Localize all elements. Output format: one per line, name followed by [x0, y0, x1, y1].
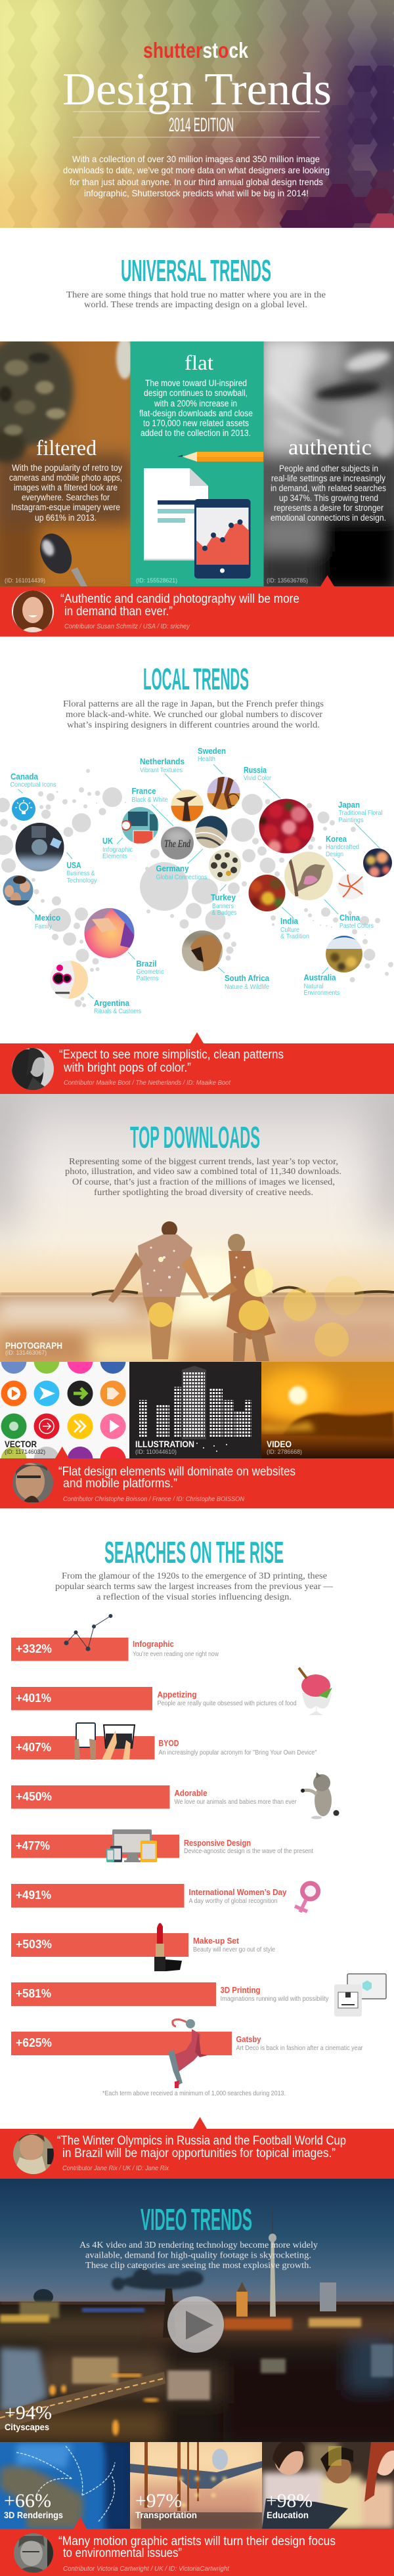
panel: transportation	[130, 2442, 262, 2531]
labels: country names: Japan	[338, 800, 360, 810]
callout: Jane Rix quote: Contributor Jane Rix / UK / ID: Jane Rix	[62, 2164, 169, 2172]
icon: Canada lightbulb	[12, 797, 35, 821]
text: intro paragraph: With a collection of over 30 million images and 350 million image	[72, 154, 320, 164]
labels: country names: Infographic	[102, 846, 133, 854]
text: intro paragraph: downloads to date, we’ve got more data on what designers are looking	[63, 165, 330, 175]
heading: video trends: These clip categories are seeing the most explosive growth.	[85, 2261, 311, 2271]
text: flat: The move toward UI-inspired	[145, 378, 247, 388]
labels: country names: Global Connections	[156, 873, 208, 881]
labels: country names: Handcrafted	[326, 843, 359, 851]
town hall and landmarks	[0, 2282, 394, 2400]
text: filtered	[5, 437, 122, 584]
subtitle: 2014 edition: 2014 EDITION	[169, 114, 234, 136]
labels: country names: South Africa	[225, 973, 270, 983]
callout: Christophe Boisson quote	[0, 1447, 394, 1508]
panel: vector icons: (ID: 117146032)	[5, 1449, 45, 1455]
text: authentic: up 347%. This growing trend	[279, 493, 378, 503]
heading: top downloads: TOP DOWNLOADS	[130, 1120, 260, 1154]
bubble: Argentina	[50, 961, 88, 999]
bubble: France	[161, 827, 194, 860]
grey land bubbles	[0, 769, 393, 1007]
labels: country names: Argentina	[94, 998, 130, 1008]
labels: country names: Natural	[303, 982, 323, 990]
labels: country names: France	[131, 786, 156, 796]
callout: Maaike Boot quote	[0, 1032, 394, 1094]
labels: country names: Sweden	[198, 746, 226, 756]
text: flat: added to the collection in 2013.	[141, 428, 251, 438]
bar: 3D printing +581%: +581%	[16, 1987, 51, 2000]
bar: gatsby +625%: Gatsby	[236, 2034, 261, 2044]
callout: Maaike Boot quote: “Expect to see more simplistic, clean patterns	[59, 1048, 284, 1062]
icon: play button	[167, 2296, 224, 2353]
heading: top downloads: Of course, that’s just a fraction of the millions of images we licensed,	[72, 1177, 335, 1187]
panel: video sunset: VIDEO	[267, 1439, 292, 1449]
bar: gatsby +625%: Art Deco is back in fashion after a cinematic year	[236, 2044, 363, 2052]
label: photograph	[5, 1340, 62, 1356]
portrait: Susan Schmitz	[12, 590, 54, 632]
labels: country names: Banners	[212, 902, 234, 910]
heading: searches on the rise: From the glamour of the 1920s to the emergence of 3D printing, these	[62, 1571, 327, 1581]
labels: country names: Mexico	[35, 913, 60, 923]
callout: Jane Rix quote	[0, 2117, 394, 2179]
bar: make-up set +503%	[11, 1923, 275, 1971]
bar: appetizing +401%	[11, 1668, 332, 1715]
text: flat	[139, 351, 253, 438]
label: photograph: (ID: 131463067)	[5, 1349, 47, 1356]
bar: responsive design +477%	[11, 1829, 313, 1862]
bubble: Mexico	[3, 875, 33, 907]
heading: top downloads: photo, illustration, and video saw a combined total of 11,340 downloads.	[65, 1167, 341, 1177]
labels: country names: Vibrant Textures	[140, 766, 183, 774]
labels: country names: UK	[102, 836, 114, 846]
bar: gatsby +625%: +625%	[16, 2036, 52, 2049]
heading: top downloads: Representing some of the biggest current trends, last year’s top vector,	[69, 1157, 338, 1167]
text: filtered: filtered	[36, 437, 97, 460]
heading: top downloads: further spotlighting the broad diversity of creative needs.	[94, 1188, 313, 1198]
bar: adorable +450%: +450%	[16, 1790, 52, 1803]
labels: country names: Black & White	[131, 796, 168, 804]
panel: education: Education	[267, 2510, 309, 2520]
bar: make-up set +503%: Make-up Set	[193, 1936, 240, 1946]
tv tower	[269, 2205, 276, 2317]
bar: 3D printing +581%: 3D Printing	[221, 1985, 261, 1995]
heading: universal trends	[66, 253, 326, 310]
text: authentic: authentic	[288, 436, 372, 460]
bubble: Sweden	[207, 777, 240, 810]
labels: country names: Technology	[67, 877, 97, 884]
heading: local trends	[63, 662, 324, 730]
bar: responsive design +477%: +477%	[16, 1839, 50, 1852]
labels: country names	[11, 746, 382, 1015]
panel: filtered	[0, 335, 138, 591]
panel: 3D renderings: +66%	[4, 2490, 51, 2512]
callout: Susan Schmitz quote: in demand than ever.”	[64, 605, 173, 619]
lens flares	[148, 1257, 364, 1357]
bar: infographic +332%: You’re even reading one right now	[133, 1650, 219, 1658]
callout: Maaike Boot quote: with bright pops of color.”	[63, 1061, 191, 1075]
bar: international womens day +491%: International Women’s Day	[189, 1887, 287, 1897]
bar: appetizing +401%: People are really quite obsessed with pictures of food	[158, 1699, 297, 1707]
labels: country names: Conceptual Icons	[11, 781, 56, 789]
bar: infographic +332%: +332%	[16, 1642, 52, 1655]
panel: illustration skyline: (ID: 110044610)	[135, 1449, 177, 1455]
bar: infographic +332%: Infographic	[133, 1639, 174, 1649]
heading: local trends: more black-and-white. We crunched our global numbers to discover	[66, 710, 322, 720]
text: flat: with a 200% increase in	[154, 399, 237, 408]
labels: country names: Russia	[244, 765, 267, 775]
icon: tablet chart	[194, 499, 251, 579]
labels: country names: Geometric	[137, 968, 164, 976]
bubble: Japan	[363, 848, 392, 877]
labels: country names: & Tradition	[280, 932, 309, 940]
labels: country names: Design	[326, 850, 343, 858]
labels: country names: Culture	[280, 926, 299, 934]
labels: country names: Turkey	[211, 892, 236, 902]
callout: Christophe Boisson quote: Contributor Christophe Boisson / France / ID: Christophe BOISSON	[63, 1495, 244, 1503]
labels: country names: China	[339, 913, 361, 923]
callout: Christophe Boisson quote: and mobile platforms.”	[63, 1477, 177, 1491]
panel: video trends cityscape	[0, 2179, 394, 2443]
labels: country names: Family	[35, 923, 53, 930]
bubble: Brazil	[84, 908, 135, 959]
callout: Christophe Boisson quote: “Flat design elements will dominate on websites	[58, 1465, 296, 1479]
bubble: UK	[121, 807, 159, 844]
bar: BYOD +407%: +407%	[16, 1741, 51, 1754]
callout: Victoria Cartwright quote	[0, 2518, 394, 2576]
bar: adorable +450%: We love our animals and babies more than ever	[175, 1798, 297, 1806]
panel: transportation: Transportation	[135, 2510, 197, 2520]
labels: country names: Business &	[67, 869, 95, 877]
labels: country names: Germany	[156, 863, 189, 873]
stat: cityscapes: +94%	[5, 2402, 52, 2424]
text: authentic: (ID: 135636785)	[267, 577, 308, 584]
panel: flat	[130, 341, 264, 586]
bar: BYOD +407%: BYOD	[159, 1738, 179, 1748]
bar: make-up set +503%: Beauty will never go out of style	[193, 1946, 275, 1954]
labels: country names: Vivid Color	[244, 774, 271, 782]
bar: make-up set +503%: +503%	[16, 1938, 52, 1951]
text: flat: flat	[185, 351, 213, 374]
labels: country names: Health	[198, 755, 215, 763]
icon: line chart	[64, 1614, 112, 1651]
panel: education	[262, 2440, 394, 2529]
image id: (ID: 155528621)	[136, 577, 177, 584]
bar: infographic +332%	[11, 1614, 219, 1661]
labels: country names: & Badges	[211, 909, 236, 917]
title: Design Trends	[62, 64, 332, 115]
couple: man	[108, 1221, 209, 1359]
bar: 3D printing +581%	[11, 1974, 386, 2017]
labels: country names: Rituals & Customs	[94, 1007, 141, 1015]
heading: video trends: VIDEO TRENDS	[141, 2202, 252, 2237]
callout: Maaike Boot quote: Contributor Maaike Boot / The Netherlands / ID: Maaike Boot	[64, 1079, 231, 1087]
bar: BYOD +407%	[11, 1723, 317, 1760]
callout: Victoria Cartwright quote: to environmental issues”	[63, 2546, 182, 2560]
labels: country names: India	[280, 916, 299, 926]
callout: Susan Schmitz quote: “Authentic and candid photography will be more	[60, 592, 299, 606]
portrait: Maaike Boot	[12, 1048, 54, 1094]
callout: Victoria Cartwright quote: Contributor Victoria Cartwright / UK / ID: VictoriaCartwright	[63, 2565, 230, 2573]
bar: gatsby +625%	[11, 2019, 363, 2088]
bubble: Russia	[259, 798, 314, 854]
bar: international womens day +491%: A day worthy of global recognition	[189, 1897, 278, 1905]
text: intro paragraph: for than just about anyone. In our third annual global design trends	[70, 177, 323, 187]
text: filtered: images with a filtered look are	[14, 483, 118, 492]
couple: woman	[210, 1234, 276, 1361]
bar: international womens day +491%: +491%	[16, 1888, 51, 1902]
heading: video trends	[79, 2202, 318, 2271]
heading: local trends: LOCAL TRENDS	[143, 662, 249, 696]
labels: country names: Korea	[326, 834, 347, 844]
label: photograph: PHOTOGRAPH	[5, 1340, 62, 1351]
logo: shutterstock: shutterstock	[143, 38, 249, 62]
callout: Jane Rix quote: “The Winter Olympics in Russia and the Football World Cup	[57, 2134, 346, 2148]
text: filtered: Instagram-esque imagery were	[11, 502, 120, 512]
text: filtered: (ID: 161014439)	[5, 577, 45, 584]
icon: 3D printer	[334, 1974, 386, 2017]
panel: top downloads photo	[0, 1083, 394, 1366]
bubble: India	[248, 875, 286, 912]
icon: responsive devices	[106, 1829, 157, 1862]
bubble: China	[284, 852, 333, 900]
heading: local trends: Floral patterns are all the rage in Japan, but the French prefer things	[63, 699, 324, 709]
text: flat: design continues to snowball,	[144, 388, 248, 398]
callout: Jane Rix quote: in Brazil will be major opportunities for topical images.”	[62, 2147, 336, 2160]
labels: country names: Canada	[11, 772, 39, 781]
bubble: Australia	[326, 936, 362, 972]
text: intro paragraph: infographic, Shutterstock predicts what will be big in 2014!	[84, 188, 309, 198]
bubble: Netherlands	[171, 789, 204, 822]
labels: country names: USA	[67, 860, 81, 870]
labels: country names: Traditional Floral	[339, 809, 382, 817]
icon: female symbol	[295, 1883, 318, 1912]
text: authentic: People and other subjects in	[279, 464, 378, 473]
bar: adorable +450%	[11, 1772, 339, 1819]
panel: video sunset	[258, 1362, 394, 1458]
portrait: Jane Rix	[13, 2133, 54, 2175]
icon: pencil	[177, 452, 263, 462]
panel: 3D renderings: 3D Renderings	[4, 2510, 63, 2520]
callout: Victoria Cartwright quote: “Many motion graphic artists will turn their design focus	[58, 2535, 336, 2548]
bar: BYOD +407%: An increasingly popular acronym for "Bring Your Own Device"	[159, 1749, 317, 1757]
bar: adorable +450%: Adorable	[175, 1788, 208, 1798]
bubble: USA	[15, 823, 65, 874]
bubble: South Africa	[182, 930, 223, 972]
callout: Susan Schmitz quote: Contributor Susan Schmitz / USA / ID: srichey	[64, 622, 190, 630]
text: flat: flat-design downloads and close	[139, 408, 253, 418]
panel: hero header	[0, 0, 394, 228]
panel: illustration skyline: ILLUSTRATION	[135, 1439, 194, 1449]
connector lines	[18, 764, 380, 999]
text: flat: to 170,000 new related assets	[143, 418, 249, 428]
bar: appetizing +401%: +401%	[16, 1692, 51, 1705]
stat: cityscapes: Cityscapes	[5, 2422, 49, 2432]
labels: country names: Nature & Wildlife	[225, 983, 269, 991]
heading: searches on the rise: popular search terms saw the largest increases from the previous year —	[55, 1582, 334, 1592]
icon: tablet and laptop with hands	[74, 1723, 135, 1760]
labels: country names: Brazil	[137, 959, 156, 969]
text: intro paragraph	[63, 154, 330, 198]
text: authentic: represents a desire for stronger	[274, 503, 383, 513]
text: filtered: everywhere. Searches for	[22, 492, 110, 502]
heading: searches on the rise	[55, 1535, 334, 1602]
heading: video trends: As 4K video and 3D rendering technology become more widely	[79, 2240, 318, 2250]
bar: responsive design +477%: Device-agnostic design is the wave of the present	[184, 1847, 313, 1855]
bar: appetizing +401%: Appetizing	[158, 1690, 197, 1699]
panel: transportation: +97%	[135, 2490, 182, 2512]
bar: responsive design +477%: Responsive Design	[184, 1838, 251, 1848]
labels: country names: Australia	[303, 972, 336, 982]
heading: local trends: what’s inspiring designers in different countries around the world.	[67, 720, 320, 730]
panel: video sunset: (ID: 2786668)	[267, 1449, 302, 1455]
labels: country names: Elements	[102, 852, 127, 860]
chart: world bubble map	[0, 746, 393, 1015]
icon: kitten	[301, 1772, 339, 1819]
labels: country names: Paintings	[339, 816, 364, 824]
heading: top downloads	[65, 1120, 341, 1198]
heading: video trends: available, demand for high-quality footage is skyrocketing.	[85, 2251, 311, 2260]
heading: universal trends: There are some things that hold true no matter where you are in the	[66, 290, 326, 300]
bar: 3D printing +581%: Imaginations running wild with possibility	[221, 1995, 329, 2003]
text: filtered: With the popularity of retro toy	[12, 463, 122, 473]
icon: gatsby woman	[168, 2019, 208, 2088]
icon: document	[144, 468, 208, 561]
text: authentic	[267, 436, 386, 584]
icon: ice cream	[299, 1668, 332, 1715]
panel: education: +98%	[266, 2490, 313, 2512]
bubble: Turkey	[209, 849, 241, 882]
bar: international womens day +491%	[11, 1883, 318, 1912]
panel: authentic	[259, 335, 394, 591]
callout: Susan Schmitz quote	[0, 575, 394, 637]
panel: 3D renderings	[0, 2442, 130, 2529]
panel: vector icons	[1, 1362, 126, 1458]
heading: searches on the rise: a reflection of the visual stories influencing design.	[97, 1592, 292, 1602]
heading: universal trends: world. These trends are impacting design on a global level.	[84, 300, 307, 310]
text: filtered: cameras and mobile photo apps,	[9, 473, 122, 483]
labels: country names: Patterns	[137, 974, 159, 982]
footnote: *Each term above received a minimum of 1,000 searches during 2013.	[102, 2089, 286, 2097]
panel: illustration skyline	[129, 1362, 261, 1458]
bubble: France: The End	[164, 839, 191, 850]
bubble: Germany	[195, 816, 228, 848]
portrait: Victoria Cartwright	[14, 2533, 53, 2573]
panel: vector icons: VECTOR	[5, 1439, 37, 1449]
labels: country names: Environments	[303, 989, 340, 997]
bubble: Korea	[338, 873, 364, 900]
portrait: Christophe Boisson	[12, 1462, 53, 1503]
labels: country names: Netherlands	[140, 756, 185, 766]
icon: lipstick	[154, 1923, 182, 1971]
clouds	[112, 2268, 204, 2290]
labels: country names: Pastel Colors	[339, 922, 374, 930]
text: filtered: up 661% in 2013.	[35, 513, 97, 523]
